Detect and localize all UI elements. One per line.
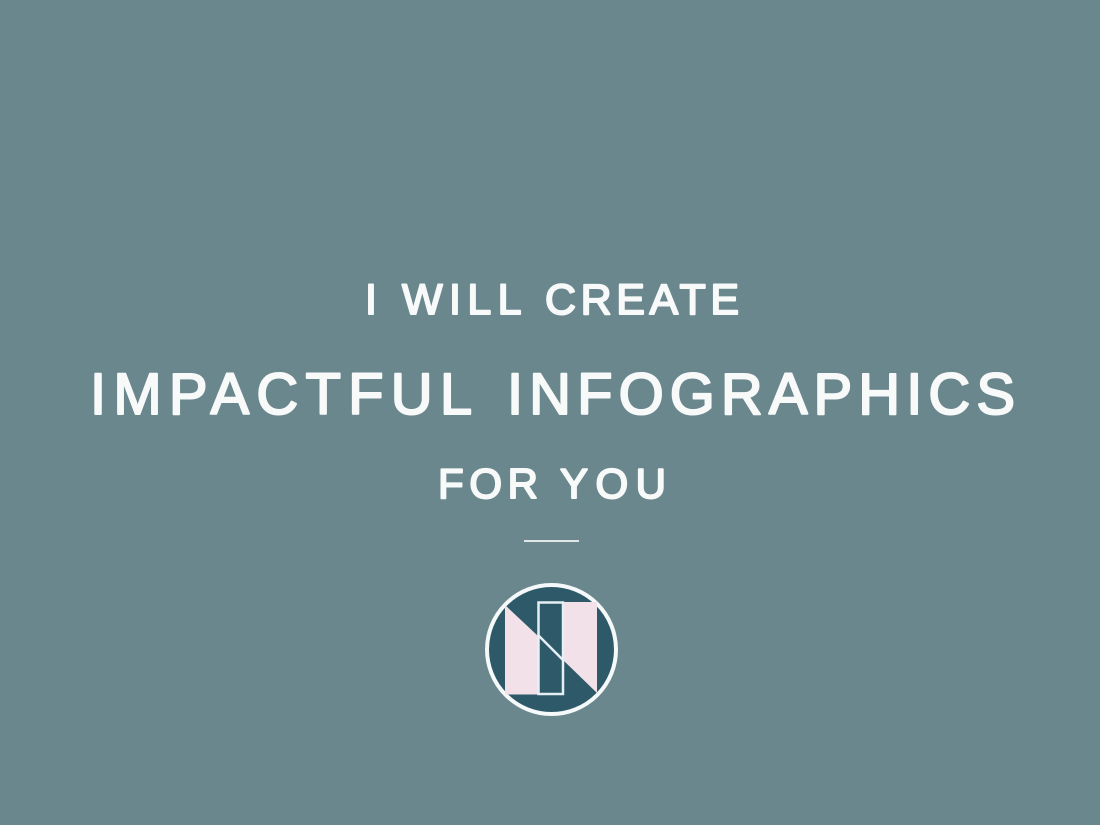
heading line: I will create: I <box>365 276 377 324</box>
heading line: I will create: CREATE <box>545 276 739 324</box>
heading line: for you: YOU <box>560 460 666 507</box>
main title: impactful infographics: INFOGRAPHICS <box>507 362 1015 427</box>
heading line: for you: FOR <box>438 460 538 507</box>
icon: circular N logo <box>487 585 616 714</box>
heading line: I will create: WILL <box>402 276 521 324</box>
main title: impactful infographics: IMPACTFUL <box>90 362 471 427</box>
divider rule <box>524 540 579 542</box>
